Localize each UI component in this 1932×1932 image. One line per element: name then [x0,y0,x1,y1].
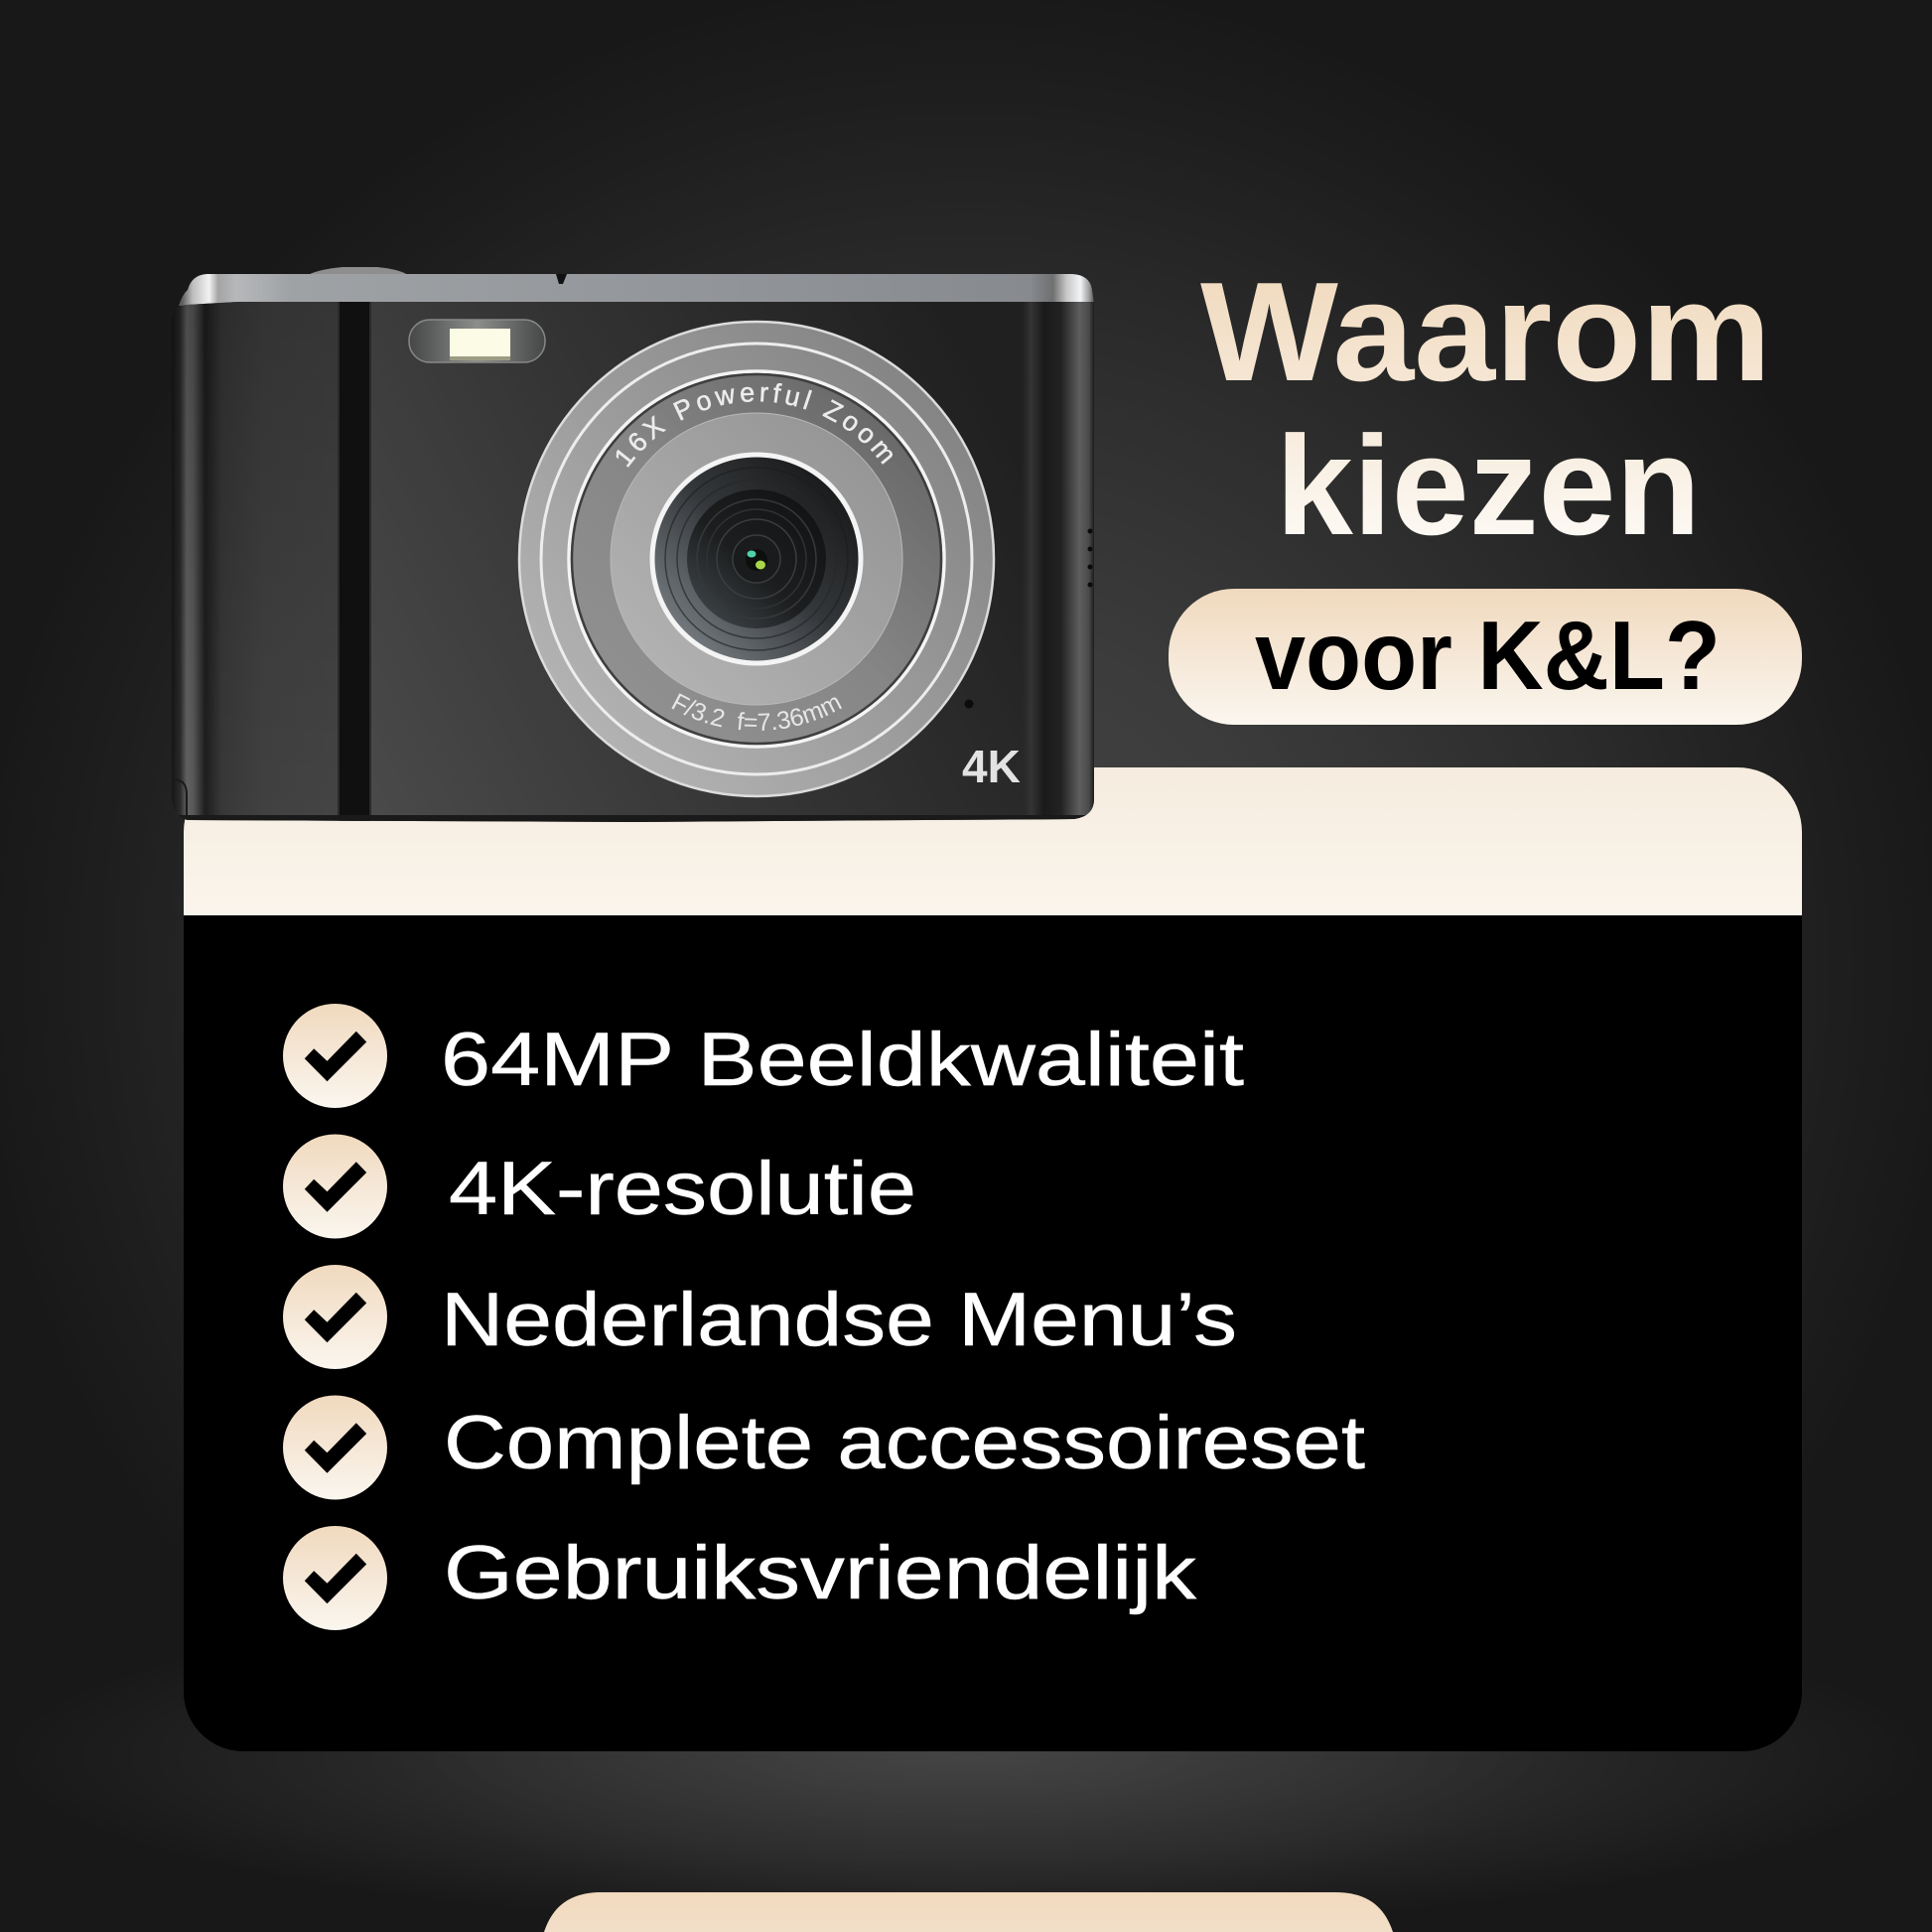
panel: cream header strip [184,767,1802,915]
feature: 64MP Beeldkwaliteit [283,1004,1244,1108]
heading pill: voor K&L? [1169,589,1802,725]
camera silver top band [179,274,1094,306]
feature: Nederlandse Menu's: Nederlandse Menu’s [441,1278,1237,1362]
feature: Gebruiksvriendelijk [283,1526,1197,1630]
camera microphone [965,699,973,709]
camera 4K label: 4K [962,741,1021,792]
feature: Complete accessoireset [283,1396,1365,1499]
feature: 4K-resolutie [283,1134,916,1239]
illustration: black compact camera [172,267,1094,822]
feature: Nederlandse Menu's [283,1265,1237,1369]
feature: Complete accessoireset: Complete accessoireset [444,1401,1365,1485]
heading: kiezen: kiezen [1276,407,1701,565]
heading pill: voor K&L?: voor K&L? [1255,601,1721,710]
camera body [172,300,1095,824]
camera notch [556,274,567,284]
panel: black feature list [184,915,1802,1751]
button: bottom call to action (cropped) [544,1892,1393,1932]
lens glass [652,455,861,663]
camera flash [409,320,545,362]
camera lens [518,320,995,798]
camera speaker holes [1088,528,1092,588]
camera top button [308,267,408,275]
feature: 4K-resolutie: 4K-resolutie [449,1147,916,1231]
feature: Gebruiksvriendelijk: Gebruiksvriendelijk [444,1531,1197,1615]
heading: Waarom: Waarom [1200,253,1771,411]
lens engraving: 16X Powerful Zoom: 16X Powerful Zoom [616,383,893,468]
lens engraving: aperture and focal length: F/3.2 f=7.36mm [671,693,842,731]
feature: 64MP Beeldkwaliteit: 64MP Beeldkwaliteit [441,1018,1244,1102]
